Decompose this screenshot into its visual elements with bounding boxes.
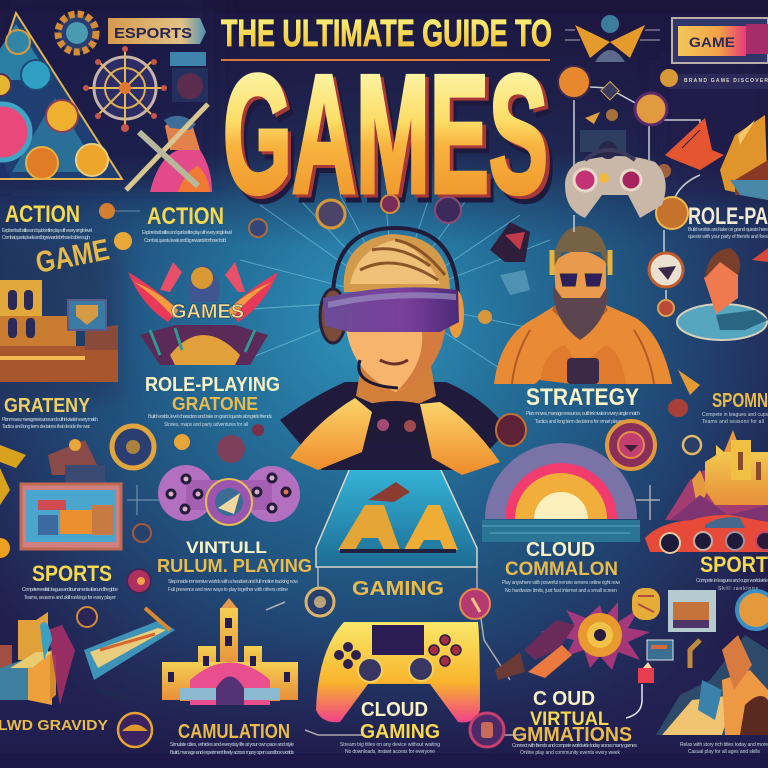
illustration: floating debris (490, 222, 530, 295)
icon: grey controller (565, 141, 666, 218)
description: No downloads, instant access for everyone (345, 749, 435, 755)
illustration: crossed swords and warrior (126, 104, 212, 192)
mouth (380, 360, 408, 364)
left ear cup (320, 289, 346, 343)
badge (0, 74, 11, 96)
icon: purple ring node (77, 607, 97, 627)
heading: cloud virtual: C OUD (533, 688, 595, 710)
description: Build worlds and take on grand quests here (688, 227, 768, 233)
heading: spomn right (702, 390, 768, 425)
radiating light rays (235, 195, 550, 375)
heading: AA emblem (338, 482, 458, 553)
icon: gold medal (112, 426, 154, 468)
hair (553, 226, 608, 268)
badge (6, 30, 30, 54)
right stick (409, 657, 433, 681)
heading: action left (2, 201, 92, 241)
icon: gear emblem (58, 14, 96, 52)
icon: small gold sigils (585, 109, 671, 178)
description: Tactics and long term decisions for smart players (535, 419, 626, 425)
esports triangle panel (0, 13, 122, 179)
icon: blue orange ring (737, 591, 768, 629)
badge (21, 60, 51, 90)
icon: right small runner (668, 370, 700, 417)
illustration: boy and disc (677, 248, 768, 340)
node (649, 253, 683, 287)
icon: connector node (127, 485, 160, 542)
icon: ship wheel (83, 46, 167, 132)
right hand (420, 402, 500, 475)
heading: role playing garbled: RULUM. PLAYING (157, 556, 312, 576)
icon: gold ring (118, 713, 152, 747)
icon: rainbow sunrise (482, 443, 640, 542)
left stick (358, 658, 382, 682)
icon: small orange coin (99, 203, 140, 219)
beard (553, 285, 608, 340)
heading line three: GMMATIONS (512, 724, 632, 746)
heading: action center: ACTION (147, 203, 224, 230)
heading: bottom left: LWD GRAVIDY (0, 717, 108, 734)
heading: cloud virtual (512, 688, 638, 756)
card: small strategy screen (170, 52, 208, 102)
description: Connect with friends and compete worldwide today across many games (512, 743, 638, 749)
illustration: tilted screen (84, 608, 175, 700)
heading: gaming center: GAMING (352, 578, 444, 600)
illustration: gold ball (0, 538, 10, 558)
heading: camulation: CAMULATION (178, 721, 290, 743)
description: bottom right: Relax with story rich titles today and more (680, 742, 768, 748)
shoulders (280, 382, 508, 470)
esports banner (108, 18, 206, 44)
illustration: characters collage (656, 635, 768, 735)
title block (221, 13, 555, 236)
description: Teams and seasons for all (702, 419, 764, 425)
heading: strategy (526, 384, 640, 425)
heading: role playing garbled (157, 556, 312, 593)
buttons (429, 635, 461, 666)
icon: yellow map token (632, 588, 660, 620)
icon: yellow game pad (316, 622, 480, 722)
description: Play anywhere with powerful remote servers online right now (502, 580, 620, 586)
card: small poster (668, 590, 716, 632)
heading line two: VIRTUAL (530, 709, 609, 730)
illustration: pirate collection above sports (48, 439, 105, 483)
face (345, 318, 446, 392)
badge (76, 144, 108, 176)
glasses (559, 273, 603, 287)
illustration: dragon (665, 115, 768, 200)
icons: right strategy nodes (607, 421, 701, 469)
description: Teams, seasons and skill rankings for every player (24, 595, 116, 601)
card: mini monitor (647, 640, 673, 660)
description: Combat, quests, levels and big rewards for those bold enough (2, 235, 90, 241)
badge (26, 147, 58, 179)
heading: sports left: SPORTS (32, 561, 112, 586)
heading: strategy: STRATEGY (526, 384, 639, 411)
card: sports screen (21, 484, 121, 549)
description: Compete in realistic leagues and tournaments all around the globe (22, 587, 118, 593)
figure: bearded gamer (494, 226, 672, 384)
description: Build, manage and experiment freely across many open sandbox worlds (170, 750, 294, 756)
top right game panel: BRAND GAME DISCOVER (684, 78, 768, 84)
description: bottom right: Casual play for all ages and skills (688, 749, 760, 755)
icon: pink node center (460, 589, 490, 619)
icon: ring node center (306, 588, 334, 616)
top right game panel (660, 18, 768, 89)
description: Build worlds, level characters and take on grand quests alongside friends (148, 414, 272, 420)
top right wing emblem (565, 15, 660, 62)
description: No hardware limits, just fast internet and a small screen (505, 588, 617, 594)
heading: camulation (170, 721, 294, 756)
description: Compete in leagues and cups (702, 412, 768, 418)
icon: floating nodes near title (249, 195, 492, 324)
description: Tactics and long term decisions that decide the war (2, 424, 90, 430)
hands (540, 345, 626, 384)
right ear cup (448, 290, 464, 338)
description: Explore fast battles and quick reflex play with every single level (2, 228, 92, 234)
description: Plan moves, manage resources and outthink rivals in every match (2, 417, 98, 423)
heading: grateny left (2, 395, 98, 430)
neck (356, 360, 436, 414)
d-pad (334, 642, 361, 669)
heading: action center (142, 203, 232, 244)
flow nodes (558, 66, 700, 316)
heading: action left: ACTION (5, 201, 80, 228)
heading: sport right (696, 552, 768, 592)
left hand (290, 398, 372, 470)
illustration: winged games emblem (128, 262, 278, 365)
illustration: skull console (580, 130, 626, 152)
illustration: left golden wing (0, 445, 26, 505)
game controller (350, 401, 440, 442)
description: bottom right (680, 742, 768, 755)
icon: red node (127, 569, 151, 593)
heading: cloud commalon: CLOUD (526, 539, 595, 561)
icon: purple controller (158, 465, 300, 525)
visor (323, 287, 459, 332)
illustration: central castle (162, 598, 298, 705)
node (635, 93, 667, 125)
icon: charger plug (626, 662, 654, 718)
heading: cloud gaming: CLOUD (361, 699, 428, 721)
head (554, 251, 606, 335)
heading line two: COMMALON (505, 559, 618, 580)
heading: role-playing: ROLE-PLAYING (145, 374, 280, 396)
heading: sports left (22, 561, 118, 601)
light beam (316, 468, 477, 567)
description: Plan moves, manage resources, outthink rivals in every single match (526, 411, 640, 417)
top right game panel: GAME (689, 34, 735, 50)
heading line two: GAMING (360, 721, 440, 743)
description: Step inside immersive worlds with a headset and full motion tracking now (168, 579, 298, 585)
illustration: red sports car (645, 515, 768, 553)
description: Compete in leagues and cups worldwide (696, 578, 768, 584)
hair (344, 234, 450, 292)
headset band (552, 250, 610, 275)
heading: game angled: GAME (33, 233, 112, 280)
torso (494, 305, 672, 384)
description: Full presence and new ways to play together with others online (168, 587, 288, 593)
illustration: stacked boxes (0, 612, 75, 705)
icon: emblem medallion (496, 414, 526, 446)
description: Skill rankings (718, 586, 758, 592)
description: quests with your party of friends and foes (688, 234, 768, 240)
heading: cloud gaming (340, 699, 440, 755)
badge (46, 100, 78, 132)
status bar (668, 74, 768, 89)
title line: the ultimate guide to: THE ULTIMATE GUIDE TO (221, 13, 552, 55)
headband (333, 228, 458, 295)
node (601, 82, 619, 100)
description: Simulate cities, vehicles and everyday life at your own pace and style (170, 742, 294, 748)
node (558, 66, 590, 98)
illustration: water under dragon (730, 180, 768, 200)
description: Stories, maps and party adventures for all (164, 422, 248, 428)
node (656, 197, 688, 229)
illustration: winged games emblem: GAMES (171, 301, 244, 323)
description: Online play and community events every week (520, 750, 620, 756)
heading: grateny left: GRATENY (4, 395, 91, 417)
illustration: left castle (0, 280, 118, 382)
title divider (221, 59, 550, 61)
controller (567, 358, 599, 384)
heading: graton: GRATONE (172, 394, 258, 414)
icon: yellow token (114, 232, 132, 250)
illustration: right castle and mountains (665, 430, 768, 525)
illustration: sunburst eye (495, 602, 650, 680)
node (658, 300, 674, 316)
icon: pink ring (470, 713, 504, 747)
connector lines (266, 485, 660, 735)
microphone arm (359, 360, 398, 388)
heading: cloud commalon (502, 539, 620, 594)
icons: small tokens (174, 424, 264, 463)
description: Combat, quests, levels and big rewards for those bold (144, 238, 226, 244)
description: Stream big titles on any device without waiting (340, 742, 440, 748)
description: Explore fast battles and quick reflex play with every single level (142, 230, 232, 236)
esports banner: ESPORTS (114, 25, 192, 42)
badge (0, 104, 30, 160)
heading: graton (148, 394, 272, 428)
main figure: VR gamer (280, 228, 508, 567)
heading: virtual: VINTULL (186, 538, 267, 557)
